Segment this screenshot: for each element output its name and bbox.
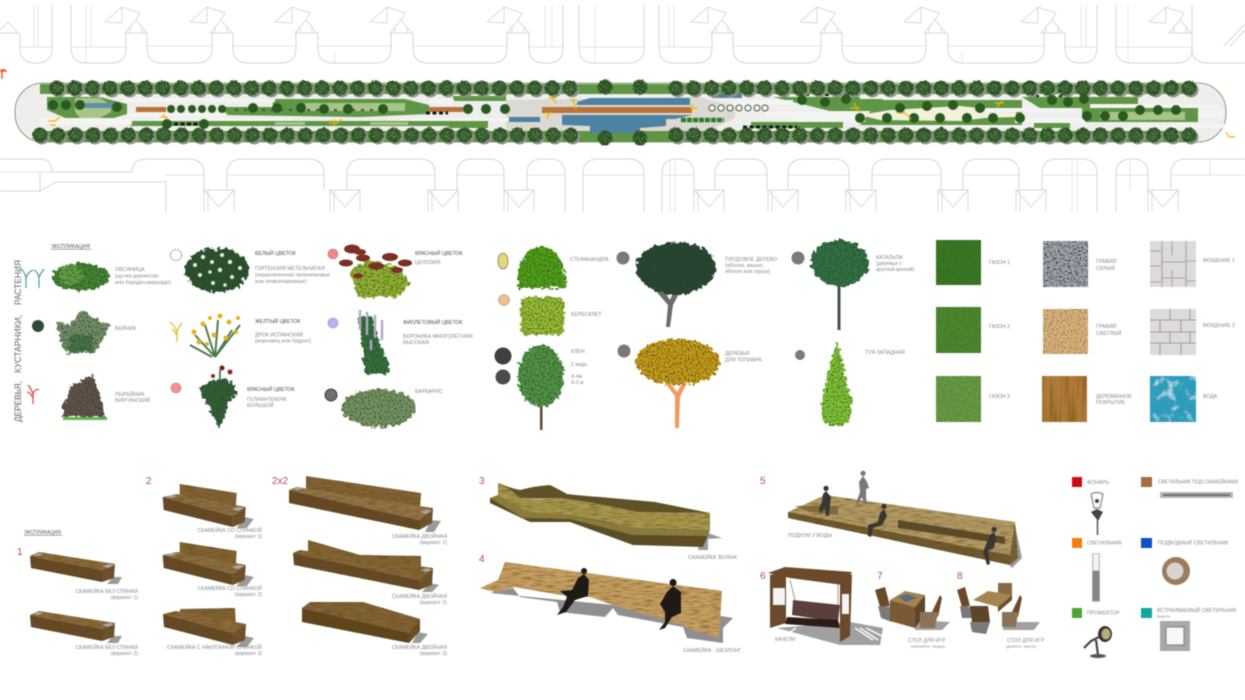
label: switchgrass: ВИРГИНСКИЙ xyxy=(115,396,150,404)
label: podium: ПОДИУМ У ВОДЫ xyxy=(788,533,832,539)
label: switchgrass xyxy=(115,390,150,404)
plant: hydrangea xyxy=(185,248,249,292)
icon: maple xyxy=(494,348,512,384)
label: chaise: СКАМЕЙКА - ШЕЗЛОНГ xyxy=(683,646,741,654)
panel: shrubs and trees legend xyxy=(494,240,914,430)
label: broom: (жарновец или бидонс) xyxy=(255,338,311,344)
label xyxy=(75,587,138,601)
label: variant 3: СКАМЕЙКА С НАКЛОННОЙ СПИНКОЙ xyxy=(167,643,262,651)
label: maple xyxy=(571,349,587,386)
plant: fruit tree xyxy=(636,242,716,327)
plant: stephanandra xyxy=(518,246,566,288)
label: fescue: ОВСЯНИЦА xyxy=(115,267,145,273)
swatch: paving 1 xyxy=(1150,241,1196,287)
plant: maple xyxy=(518,345,564,430)
label: wood decking xyxy=(1096,394,1132,406)
boulevard base surface xyxy=(15,83,1226,142)
bench: sloped back xyxy=(163,608,254,647)
dining table with chairs xyxy=(957,583,1040,634)
plant: fescue xyxy=(52,263,110,291)
panel: benches without backrest xyxy=(17,530,138,657)
label: variant 3: (вариант 3) xyxy=(235,651,262,657)
label: game table: (шахматы, нарды) xyxy=(911,644,945,648)
hedge row xyxy=(681,118,724,122)
label: variant 2 xyxy=(75,643,138,657)
panel: benches with backrest xyxy=(146,476,262,657)
label: hydrangea: БЕЛЫЙ ЦВЕТОК xyxy=(255,249,296,257)
panel: lighting legend xyxy=(1072,477,1238,658)
label: topiary tree: ДЛЯ ТОПИАРА xyxy=(725,358,762,364)
bench: chaise with silhouettes xyxy=(480,562,733,643)
benches in plan xyxy=(174,95,1080,127)
label: light gravel: ГРАВИЙ xyxy=(1096,322,1117,330)
label: veronica: ФИОЛЕТОВЫЙ ЦВЕТОК xyxy=(403,318,462,326)
grass base xyxy=(63,417,107,420)
icon: violet xyxy=(328,318,338,328)
label: game table xyxy=(908,638,946,648)
label: fescue: или бородач-маршадо) xyxy=(115,280,171,286)
number 1: 1 xyxy=(17,547,23,558)
plant: euonymus xyxy=(521,297,564,335)
label: underwater light: ПОДВОДНЫЙ СВЕТИЛЬНИК xyxy=(1158,538,1228,546)
vertical heading: РАСТЕНИЯ xyxy=(13,260,24,305)
label: water: ВОДА xyxy=(1203,394,1218,400)
label: barberry: БАРБАРИС xyxy=(415,389,443,395)
label: heliopsis: КРАСНЫЙ ЦВЕТОК xyxy=(247,385,294,393)
label: veronica: ВЫСОКАЯ xyxy=(403,340,429,346)
label: sedum: КРАСНЫЙ ЦВЕТОК xyxy=(415,249,462,257)
icon: euonymus xyxy=(498,294,510,306)
panel: surface materials xyxy=(936,240,1235,422)
label: heliopsis: БОЛЬШОЙ xyxy=(247,401,274,409)
plant: barberry xyxy=(342,389,416,427)
swatch: paving 2 xyxy=(1150,309,1196,355)
label: gray gravel: СЕРЫЙ xyxy=(1096,264,1115,272)
icon: yellow tuft xyxy=(170,322,182,342)
site plan: linear boulevard xyxy=(0,69,1235,146)
swatch: under-bench light xyxy=(1141,477,1152,487)
label: hydrangea xyxy=(255,249,330,285)
silhouette: seated figure right xyxy=(983,527,997,565)
label: dining table: (домино, карты) xyxy=(1006,644,1036,648)
label: wave: СКАМЕЙКА 'ВОЛНА' xyxy=(688,553,738,561)
label: double 1: (вариант 1) xyxy=(420,540,447,546)
number 4: 4 xyxy=(479,554,485,565)
swatch: wood decking xyxy=(1042,376,1087,422)
silhouette: seated person 1 xyxy=(557,568,589,615)
label: recessed light: модель xyxy=(1157,614,1170,618)
label: street lamp: ФОНАРЬ xyxy=(1087,480,1110,486)
bench: with back variant 2 xyxy=(163,542,254,586)
plant: sedum xyxy=(339,244,412,298)
label: variant 2: СКАМЕЙКА БЕЗ СПИНКИ xyxy=(75,643,138,651)
label: lawn 2: ГАЗОН 2 xyxy=(989,324,1010,330)
swatch: bollard xyxy=(1072,538,1082,548)
bench: double variant 1 xyxy=(289,476,441,532)
label: double 1: СКАМЕЙКА ДВОЙНАЯ xyxy=(392,532,447,540)
plant: feather grass xyxy=(55,310,110,353)
label: heliopsis xyxy=(247,385,294,409)
explication heading: ЭКСПЛИКАЦИЯ: xyxy=(24,530,62,536)
round seats row xyxy=(709,105,768,111)
label: game table: СТОЛ ДЛЯ ИГР xyxy=(908,638,946,644)
label: heliopsis: ГЕЛИАНТЕМУМ xyxy=(247,397,286,403)
tree row canopies xyxy=(40,80,1195,146)
label: fruit tree: яблоня или груша) xyxy=(725,269,770,275)
vertical heading: ДЕРЕВЬЯ, xyxy=(13,381,24,422)
number 5: 5 xyxy=(760,476,766,487)
central plaza paving xyxy=(506,97,735,136)
label: fruit tree: ПЛОДОВОЕ ДЕРЕВО xyxy=(725,257,777,263)
label: light gravel xyxy=(1096,322,1122,337)
label: maple: 2 вида xyxy=(571,362,587,368)
icon: red sedum xyxy=(328,249,338,259)
swatch: underwater light xyxy=(1141,538,1152,548)
label: recessed light xyxy=(1157,606,1236,618)
plant: purple switchgrass xyxy=(62,376,105,417)
label: wood decking: ДЕРЕВЯННОЕ xyxy=(1096,394,1132,400)
icon: thuja xyxy=(795,350,805,360)
icon: red tuft xyxy=(27,385,39,404)
bench: double variant 2 xyxy=(293,540,439,592)
label: double 3: СКАМЕЙКА ДВОЙНАЯ xyxy=(392,643,447,651)
label: stephanandra: СТЕФАНАНДРА xyxy=(570,257,609,263)
game table with chairs xyxy=(875,587,950,630)
swatch: spotlight xyxy=(1072,608,1082,618)
icon: barberry xyxy=(325,389,337,401)
icon: recessed light xyxy=(1160,621,1190,651)
label: light gravel: СВЕТЛЫЙ xyxy=(1096,329,1122,337)
panel: plants legend xyxy=(13,244,473,428)
label: fescue: (щучка дернистая xyxy=(115,274,158,280)
plant: topiary tree xyxy=(636,339,720,428)
icon: red flower xyxy=(171,383,181,393)
label: variant 2: СКАМЕЙКА СО СПИНКОЙ xyxy=(198,584,262,592)
label: maple: d-3 м xyxy=(571,380,584,386)
label: switchgrass: ПЫРЕЙНИК xyxy=(115,390,144,398)
label: sedum xyxy=(415,249,462,266)
panel: double benches xyxy=(272,476,447,657)
label: veronica: ВЕРОНИКА МНОГОЛЕТНЯЯ xyxy=(403,334,473,340)
north arrow xyxy=(0,69,7,79)
street plan: surrounding building blocks xyxy=(0,5,1245,212)
number 2x2: 2х2 xyxy=(272,476,289,487)
swatch: lawn 1 xyxy=(936,240,981,285)
tree shadows xyxy=(42,90,1195,137)
number 3: 3 xyxy=(479,476,485,487)
paving stripes xyxy=(40,94,1225,128)
icon: spotlight xyxy=(1084,626,1112,658)
label: fruit tree: (яблоня, вишня, xyxy=(725,263,764,269)
bench: no back variant 1 xyxy=(30,552,122,584)
label: double 2: СКАМЕЙКА ДВОЙНАЯ xyxy=(392,592,447,600)
explication heading: ЭКСПЛИКАЦИЯ: xyxy=(51,244,91,250)
bench: double variant 3 xyxy=(302,602,428,643)
label: broom: ЖЕЛТЫЙ ЦВЕТОК xyxy=(255,317,300,325)
podium deck xyxy=(788,471,1022,568)
label: hydrangea: или почвопокровные) xyxy=(255,279,307,285)
swatch: lawn 3 xyxy=(936,376,981,422)
label: catalpa: круглой кроной) xyxy=(876,266,914,273)
icon: fruit tree xyxy=(616,252,630,264)
label: recessed light: ВСТРАИВАЕМЫЙ СВЕТИЛЬНИК xyxy=(1157,606,1236,614)
label: feather grass: ВЕЙНИК xyxy=(115,324,136,332)
label: paving 1: МОЩЕНИЕ 1 xyxy=(1203,258,1235,264)
label: hydrangea: (нераспиленная пилиничковые xyxy=(255,272,330,278)
icon: catalpa xyxy=(792,252,804,264)
label: maple: d-4м xyxy=(571,374,582,380)
inner dark trees xyxy=(48,94,1181,129)
light markers xyxy=(48,98,1235,137)
wooden decks xyxy=(136,107,692,113)
label: dining table: СТОЛ ДЛЯ ИГР xyxy=(1007,638,1045,644)
label: broom: ДРОК ИСПАНСКИЙ xyxy=(255,330,303,338)
icon: street lamp xyxy=(1091,492,1103,535)
label: topiary tree: ДЕРЕВЬЯ xyxy=(725,351,750,357)
panel: swing and game tables xyxy=(760,567,1045,648)
bench: with back variant 1 xyxy=(163,484,254,528)
swing pergola xyxy=(768,567,883,645)
label: variant 1 xyxy=(198,526,262,540)
label: thuja: ТУЯ ЗАПАДНАЯ xyxy=(865,350,905,356)
label: variant 2: (вариант 2) xyxy=(235,592,262,598)
icon: topiary xyxy=(618,344,630,358)
label: gray gravel: ГРАВИЙ xyxy=(1096,257,1117,265)
swatch: gray gravel xyxy=(1043,241,1088,287)
icon: fescue tuft xyxy=(20,268,44,288)
label: variant 3 xyxy=(167,643,262,657)
number 2: 2 xyxy=(146,476,152,487)
swatch: light gravel xyxy=(1043,309,1088,354)
label: spotlight: ПРОЖЕКТОР xyxy=(1087,610,1120,616)
bench: no back variant 2 xyxy=(30,611,122,643)
silhouette: seated figure left xyxy=(819,486,831,516)
label: fruit tree xyxy=(725,257,777,275)
icon: bollard xyxy=(1092,553,1100,602)
light lawn insets xyxy=(75,98,1185,125)
label: hydrangea: ГОРТЕНЗИЯ МЕТЕЛЬЧАТАЯ xyxy=(255,266,325,272)
label: double 3: (вариант 3) xyxy=(420,651,447,657)
icon: white flower xyxy=(170,250,182,260)
label: double 3 xyxy=(392,643,447,657)
panel: wave and chaise benches xyxy=(479,476,741,654)
bench: wave xyxy=(490,483,722,550)
label: fescue xyxy=(115,267,171,286)
label: maple: КЛЕН xyxy=(571,349,585,355)
label: sedum: ЦЕЛОЗИЯ xyxy=(415,260,441,266)
plant: broom xyxy=(190,314,240,357)
label: paving 2: МОЩЕНИЕ 2 xyxy=(1203,323,1235,329)
label: lawn 3: ГАЗОН 3 xyxy=(989,394,1010,400)
water pools xyxy=(85,94,742,133)
vertical heading xyxy=(13,260,24,422)
icon: underwater light xyxy=(1162,557,1190,585)
label: swing: КАЧЕЛИ xyxy=(775,637,795,643)
label: double 2 xyxy=(392,592,447,606)
icon: linear light xyxy=(1160,492,1233,498)
number 8: 8 xyxy=(957,571,963,582)
plant: catalpa xyxy=(811,240,869,330)
label: veronica xyxy=(403,318,473,346)
label: variant 2: (вариант 2) xyxy=(111,651,138,657)
label: catalpa: КАТАЛЬПА xyxy=(876,255,903,261)
icon: feather grass xyxy=(32,320,44,332)
label: euonymus: БЕРЕСКЛЕТ xyxy=(571,312,602,318)
panel: water podium xyxy=(760,471,1022,568)
label: bollard: СВЕТИЛЬНИК xyxy=(1087,540,1122,546)
label: topiary tree xyxy=(725,351,762,364)
plant: thuja xyxy=(821,341,852,426)
label: catalpa: (деревья с xyxy=(876,261,902,267)
label: double 1 xyxy=(392,532,447,546)
label: double 2: (вариант 2) xyxy=(420,600,447,606)
label: СКАМЕЙКА БЕЗ СПИНКИ xyxy=(75,587,138,595)
number 7: 7 xyxy=(877,571,883,582)
label: variant 1: (вариант 1) xyxy=(235,534,262,540)
label: wood decking: ПОКРЫТИЕ xyxy=(1096,400,1126,406)
label: catalpa xyxy=(876,255,914,273)
swatch: lawn 2 xyxy=(936,307,981,353)
label: (вариант 1) xyxy=(111,595,138,601)
label: dining table xyxy=(1006,638,1045,648)
icon: stephanandra xyxy=(498,253,508,269)
vertical heading: КУСТАРНИКИ, xyxy=(13,315,24,373)
plant: heliopsis xyxy=(198,366,238,428)
swatch: recessed light xyxy=(1141,608,1152,618)
silhouette: seated figure centre xyxy=(868,504,887,537)
silhouette: seated person 2 xyxy=(659,579,681,630)
label: variant 1: СКАМЕЙКА СО СПИНКОЙ xyxy=(198,526,262,534)
number 6: 6 xyxy=(760,571,766,582)
label: gray gravel xyxy=(1096,257,1117,272)
label: lawn 1: ГАЗОН 1 xyxy=(989,260,1010,266)
single trees at plaza xyxy=(598,80,648,146)
silhouette: walking figure xyxy=(856,471,869,504)
label: variant 2 xyxy=(198,584,262,598)
plant: veronica xyxy=(358,310,390,375)
swatch: street lamp xyxy=(1072,477,1082,487)
swatch: water xyxy=(1150,376,1196,422)
lawn bands xyxy=(40,84,1198,142)
label: broom xyxy=(255,317,311,344)
label: under-bench light: СВЕТИЛЬНИК ПОД СКАМЕЙКАМИ xyxy=(1158,478,1238,486)
cream gravel bed xyxy=(859,106,1016,121)
